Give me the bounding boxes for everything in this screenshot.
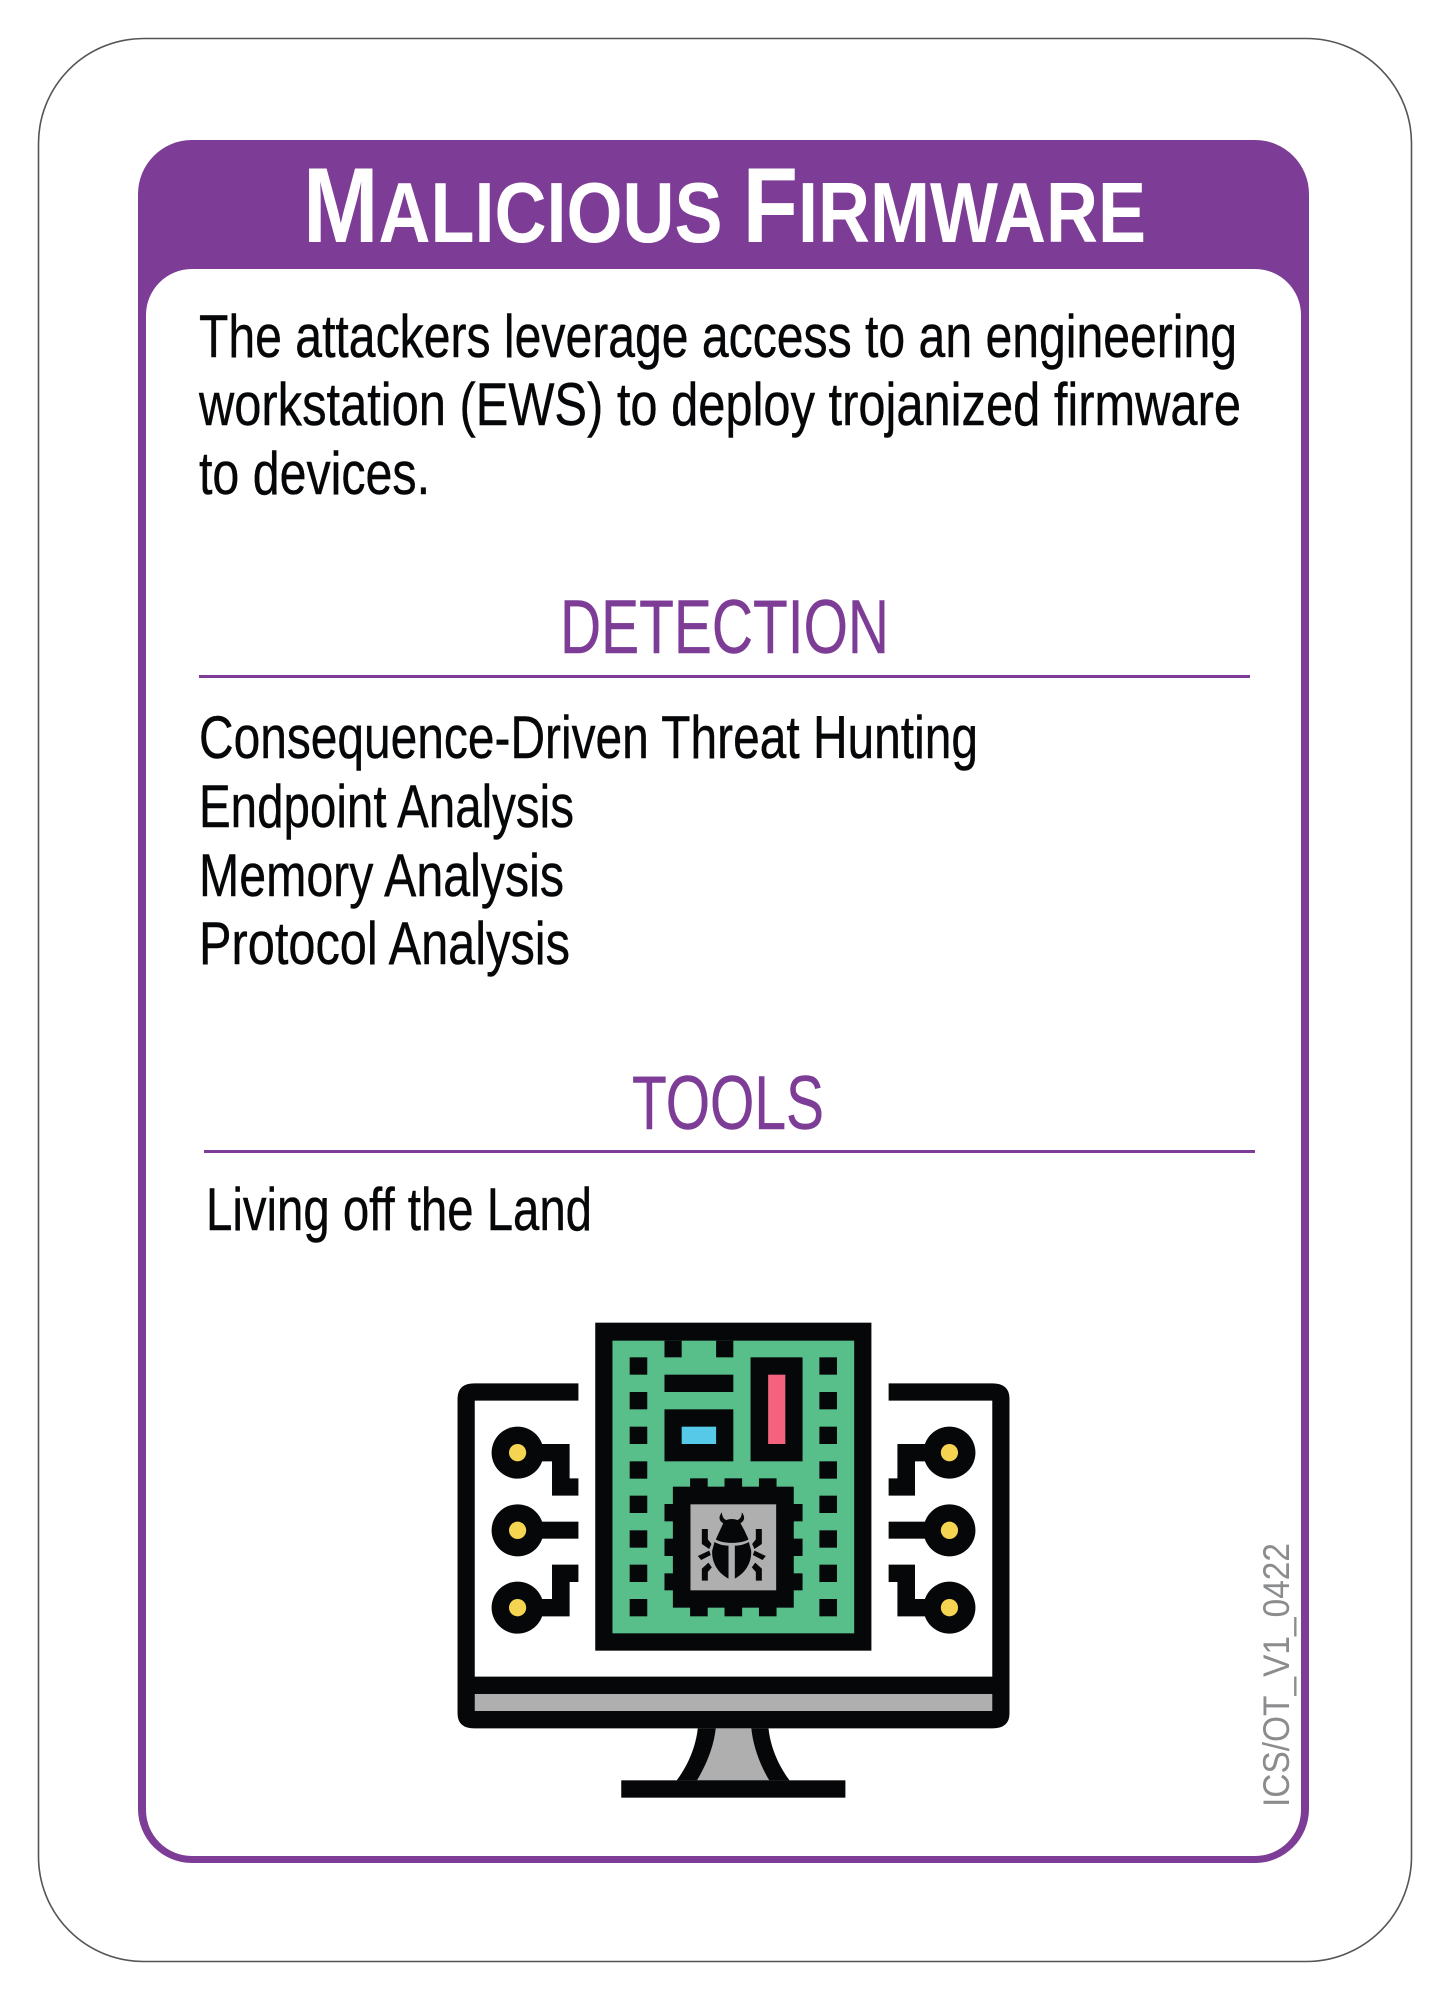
detection list: Endpoint Analysis — [199, 773, 574, 840]
version code: ICS/OT_V1_0422 — [1256, 1543, 1297, 1807]
circuit board — [595, 1323, 871, 1651]
panel: purple card frame — [138, 140, 1309, 1863]
heading: tools: TOOLS — [632, 1061, 824, 1146]
trace nodes — [509, 1444, 958, 1616]
icon: monitor with infected circuit board — [458, 1323, 1009, 1798]
detection list: Consequence-Driven Threat Hunting — [199, 704, 978, 771]
tools list: Living off the Land — [206, 1176, 592, 1243]
description text — [198, 303, 1241, 507]
processor chip — [664, 1478, 803, 1616]
detection list — [199, 704, 978, 977]
circuit traces left — [492, 1427, 578, 1634]
circuit traces right — [889, 1427, 975, 1634]
monitor body — [458, 1383, 1009, 1728]
title: MALICIOUS FIRMWARE — [303, 145, 1146, 265]
detection list: Memory Analysis — [199, 842, 564, 909]
heading: detection: DETECTION — [560, 585, 889, 670]
description text: to devices. — [199, 440, 430, 507]
icon: bug — [698, 1512, 766, 1581]
monitor stand — [621, 1728, 845, 1798]
description text: workstation (EWS) to deploy trojanized firmware — [198, 371, 1241, 438]
detection list: Protocol Analysis — [199, 910, 570, 977]
panel: white content area — [146, 269, 1301, 1856]
